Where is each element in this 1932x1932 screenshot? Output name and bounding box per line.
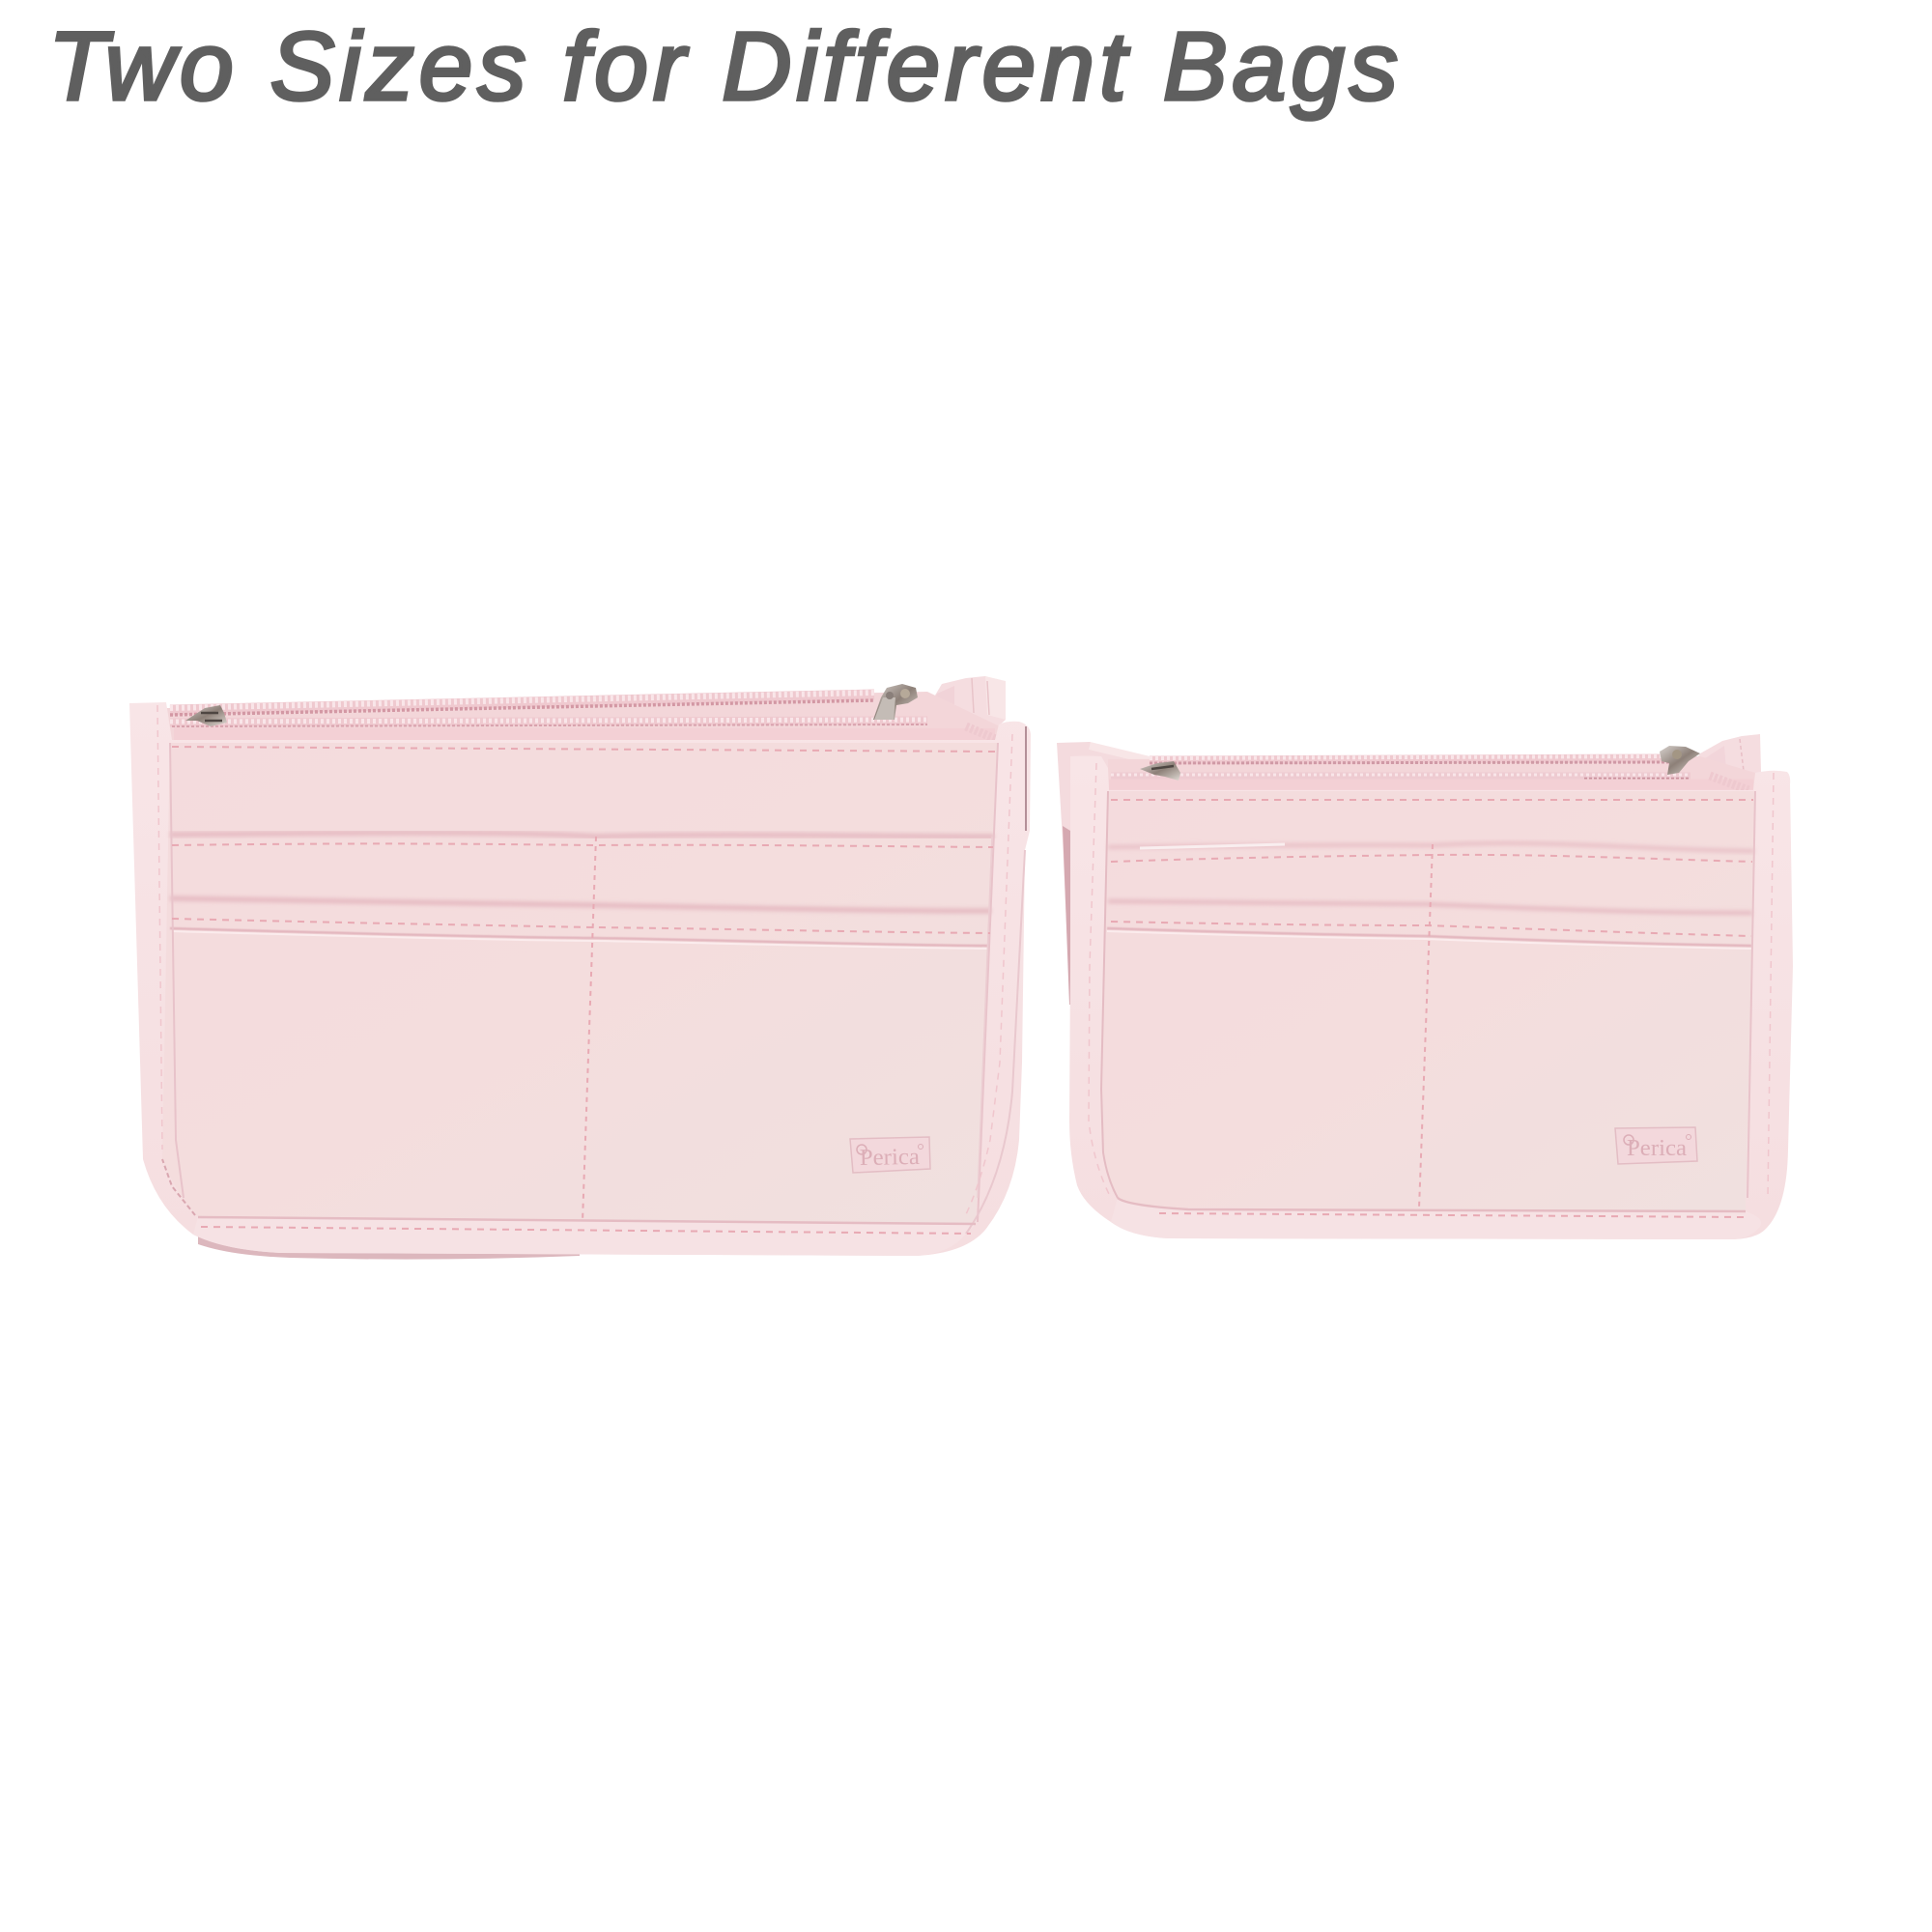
large: logo tag: Perica [860, 1145, 920, 1171]
large: edge shadow on right binding [1025, 726, 1027, 831]
large: left zipper slider [185, 705, 227, 726]
small: front panel [1101, 791, 1755, 1211]
large: back flaps [921, 676, 1006, 726]
small organizer [1057, 734, 1793, 1239]
small: left zipper slider [1140, 761, 1180, 781]
small: right zipper slider [1660, 746, 1700, 775]
small: bottom binding [1111, 1198, 1761, 1239]
small: pocket creases [1101, 791, 1755, 1211]
large: stitching [157, 705, 1012, 1234]
large: bottom binding [193, 1217, 976, 1256]
small: back right flap [1686, 734, 1761, 773]
large: logo tag [850, 1137, 930, 1173]
large: outer binding silhouette [129, 702, 1031, 1256]
small: back left strip and flap [1057, 742, 1150, 1005]
title: Two Sizes for Different Bags [48, 13, 1398, 121]
small: logo tag [1615, 1127, 1697, 1164]
large organizer [129, 676, 1031, 1260]
large: zipper tape and teeth [166, 692, 1000, 746]
small: zipper tape and teeth [1108, 756, 1755, 794]
large: front panel [162, 743, 998, 1224]
large: pocket creases [162, 743, 1025, 1234]
large: right zipper slider [873, 684, 918, 720]
small: logo tag: Perica [1627, 1136, 1687, 1161]
small: stitching [1089, 763, 1774, 1217]
small: outer binding silhouette [1069, 755, 1793, 1239]
large: under-shadow at bottom [198, 1236, 580, 1260]
